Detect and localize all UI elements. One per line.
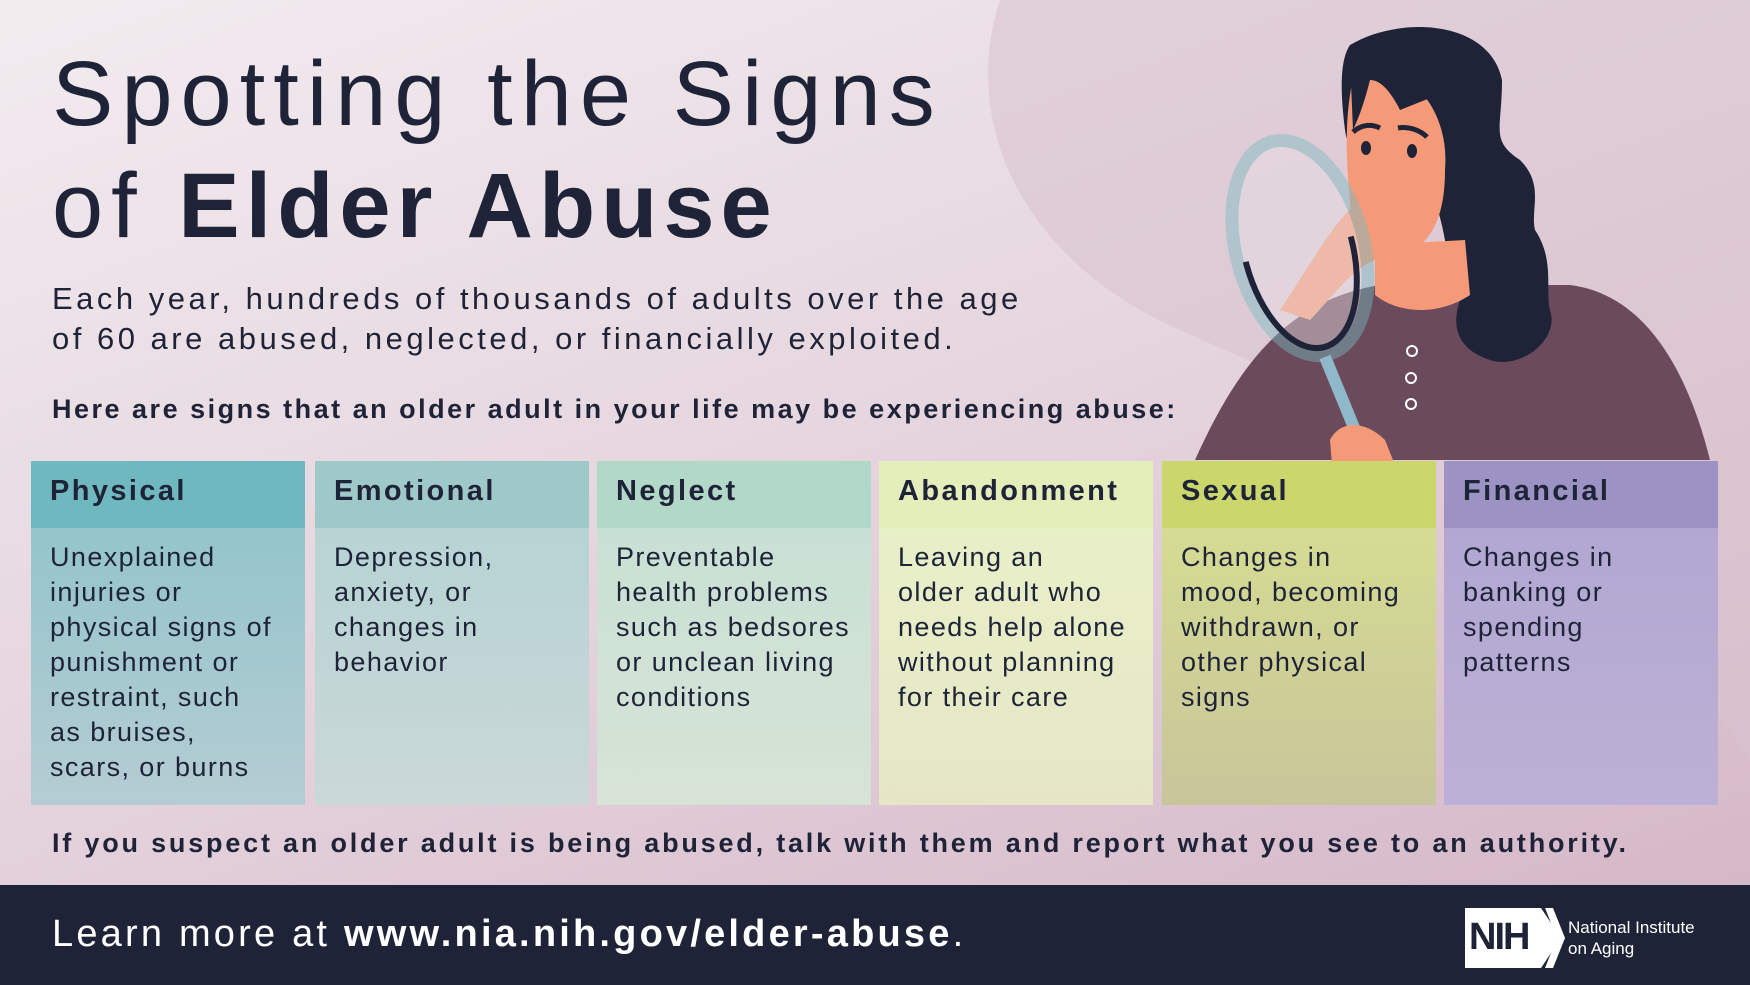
card: Financial: banking or [1463,577,1603,607]
intro text: Each year, hundreds of thousands of adults over the age [52,281,1022,316]
card: Abandonment: Abandonment [898,475,1119,507]
card: Physical: scars, or burns [50,752,250,782]
buttons [1407,346,1417,356]
card: Abandonment: for their care [898,682,1069,712]
card: Sexual: Sexual [1181,475,1289,507]
footer link text: Learn more at www.nia.nih.gov/elder-abuse. [52,913,966,955]
footer [0,885,1750,985]
card: Financial: patterns [1463,647,1572,677]
card: Neglect: conditions [616,682,752,712]
card: Emotional: Emotional [334,475,496,507]
card: Financial: spending [1463,612,1584,642]
NIH logo: National Institute [1568,918,1695,937]
magnifier [1210,125,1390,371]
card: Neglect: or unclean living [616,647,835,677]
card: Neglect [597,461,871,805]
card: Physical: punishment or [50,647,239,677]
intro text: of 60 are abused, neglected, or financially exploited. [52,321,956,356]
card: Abandonment: Leaving an [898,542,1044,572]
lead-in heading: Here are signs that an older adult in your life may be experiencing abuse: [52,394,1178,424]
intro text [52,281,1022,356]
card: Sexual: mood, becoming [1181,577,1400,607]
card: Physical: Unexplained [50,542,216,572]
card: Neglect: Preventable [616,542,776,572]
card: Physical: as bruises, [50,717,196,747]
hand at chin [1280,199,1408,320]
NIH logo: on Aging [1568,939,1634,958]
card: Physical: restraint, such [50,682,241,712]
lower hand [1330,425,1395,465]
card: Emotional [315,461,589,805]
card: Physical [31,461,305,805]
card: Neglect: health problems [616,577,829,607]
card: Emotional: behavior [334,647,449,677]
NIH logo: NIH [1469,916,1528,958]
card: Physical: physical signs of [50,612,272,642]
card: Abandonment [879,461,1153,805]
NIH logo [1465,908,1695,968]
card: Abandonment: older adult who [898,577,1102,607]
call to action: If you suspect an older adult is being abused, talk with them and report what you see to an authority. [52,828,1629,858]
card: Sexual: other physical [1181,647,1367,677]
card: Financial [1444,461,1718,805]
illustration: woman with magnifier [1195,27,1710,461]
title [52,43,943,257]
card: Sexual: withdrawn, or [1181,612,1360,642]
card: Financial: Changes in [1463,542,1614,572]
title: of Elder Abuse [52,155,778,257]
card: Emotional: anxiety, or [334,577,472,607]
card: Emotional: Depression, [334,542,493,572]
card: Physical: injuries or [50,577,182,607]
title: Spotting the Signs [52,43,943,145]
body [1195,285,1710,460]
card: Sexual: signs [1181,682,1251,712]
card: Financial: Financial [1463,475,1610,507]
card: Sexual: Changes in [1181,542,1332,572]
card: Neglect: such as bedsores [616,612,850,642]
card: Sexual [1162,461,1436,805]
neck and face [1375,240,1470,310]
card: Emotional: changes in [334,612,479,642]
card: Neglect: Neglect [616,475,738,507]
card: Physical: Physical [50,475,187,507]
hair back [1342,27,1552,362]
card: Abandonment: without planning [898,647,1116,677]
card: Abandonment: needs help alone [898,612,1126,642]
